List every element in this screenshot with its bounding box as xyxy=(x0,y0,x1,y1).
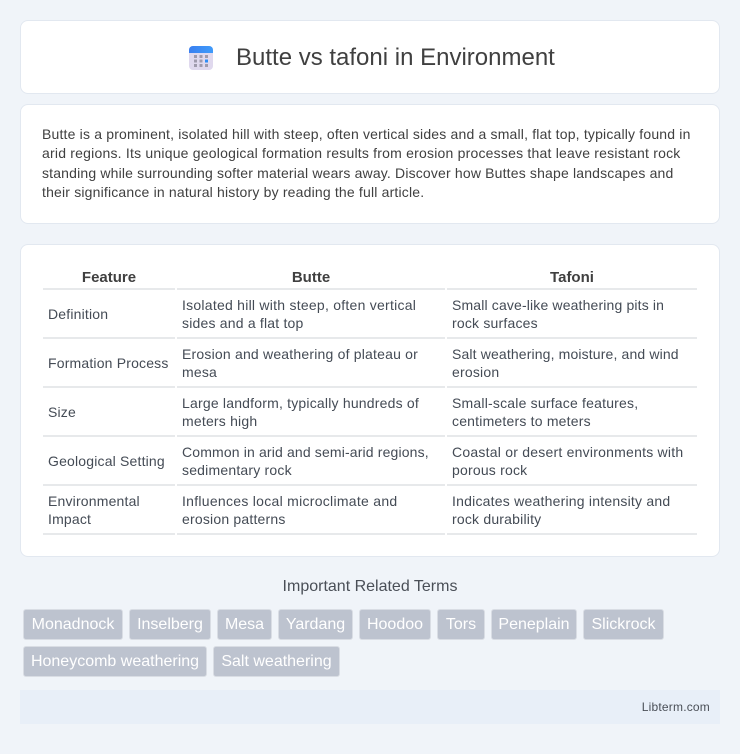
comparison table: Environmental xyxy=(48,493,140,509)
related terms tags: Salt weathering xyxy=(221,653,332,670)
related terms tags: Mesa xyxy=(225,616,264,633)
comparison table: Tafoni xyxy=(550,269,594,286)
related terms tags xyxy=(23,609,664,677)
header card xyxy=(20,20,720,94)
intro text: standing while surrounding softer material wears away. Discover how Buttes shape landscapes and xyxy=(42,165,673,181)
comparison table: mesa xyxy=(182,364,217,380)
related terms tags: Peneplain xyxy=(498,616,570,633)
comparison table: Influences local microclimate and xyxy=(182,493,397,509)
comparison table: Erosion and weathering of plateau or xyxy=(182,346,418,362)
footer credit: Libterm.com xyxy=(642,700,710,714)
comparison table: Coastal or desert environments with xyxy=(452,444,683,460)
related terms heading: Important Related Terms xyxy=(283,578,457,595)
comparison table: sides and a flat top xyxy=(182,315,304,331)
related terms tags: Yardang xyxy=(286,616,345,633)
comparison table: Small-scale surface features, xyxy=(452,395,638,411)
comparison table: meters high xyxy=(182,413,257,429)
comparison table: Feature xyxy=(82,269,136,286)
comparison table: rock durability xyxy=(452,511,541,527)
comparison table: erosion xyxy=(452,364,499,380)
comparison table: Small cave-like weathering pits in xyxy=(452,297,664,313)
related terms tags: Hoodoo xyxy=(367,616,423,633)
footer bar xyxy=(20,690,720,724)
comparison table: Large landform, typically hundreds of xyxy=(182,395,419,411)
related terms tags: Honeycomb weathering xyxy=(31,653,199,670)
intro text: Butte is a prominent, isolated hill with steep, often vertical sides and a small, flat top, typically found in xyxy=(42,126,691,142)
comparison table: Butte xyxy=(292,269,330,286)
comparison table: Geological Setting xyxy=(48,453,165,469)
comparison table: centimeters to meters xyxy=(452,413,591,429)
related terms tags: Slickrock xyxy=(591,616,656,633)
comparison table: Isolated hill with steep, often vertical xyxy=(182,297,416,313)
intro text xyxy=(42,126,691,200)
comparison table xyxy=(43,269,697,535)
comparison table: Common in arid and semi-arid regions, xyxy=(182,444,429,460)
comparison table: erosion patterns xyxy=(182,511,286,527)
comparison table: Definition xyxy=(48,306,108,322)
intro text: their significance in natural history by reading the full article. xyxy=(42,184,424,200)
comparison table: Impact xyxy=(48,511,91,527)
comparison table: sedimentary rock xyxy=(182,462,292,478)
related terms tags: Tors xyxy=(446,616,476,633)
comparison table: Size xyxy=(48,404,76,420)
intro text: arid regions. Its unique geological formation results from erosion processes that leave resistant rock xyxy=(42,145,680,161)
title: Butte vs tafoni in Environment xyxy=(236,44,555,71)
comparison table: Formation Process xyxy=(48,355,169,371)
related terms tags: Inselberg xyxy=(137,616,203,633)
icon: calendar xyxy=(189,46,213,70)
comparison table: rock surfaces xyxy=(452,315,538,331)
comparison table panel xyxy=(20,244,720,557)
intro card xyxy=(20,104,720,224)
comparison table: Indicates weathering intensity and xyxy=(452,493,670,509)
comparison table: porous rock xyxy=(452,462,527,478)
related terms tags: Monadnock xyxy=(32,616,114,633)
comparison table: Salt weathering, moisture, and wind xyxy=(452,346,679,362)
